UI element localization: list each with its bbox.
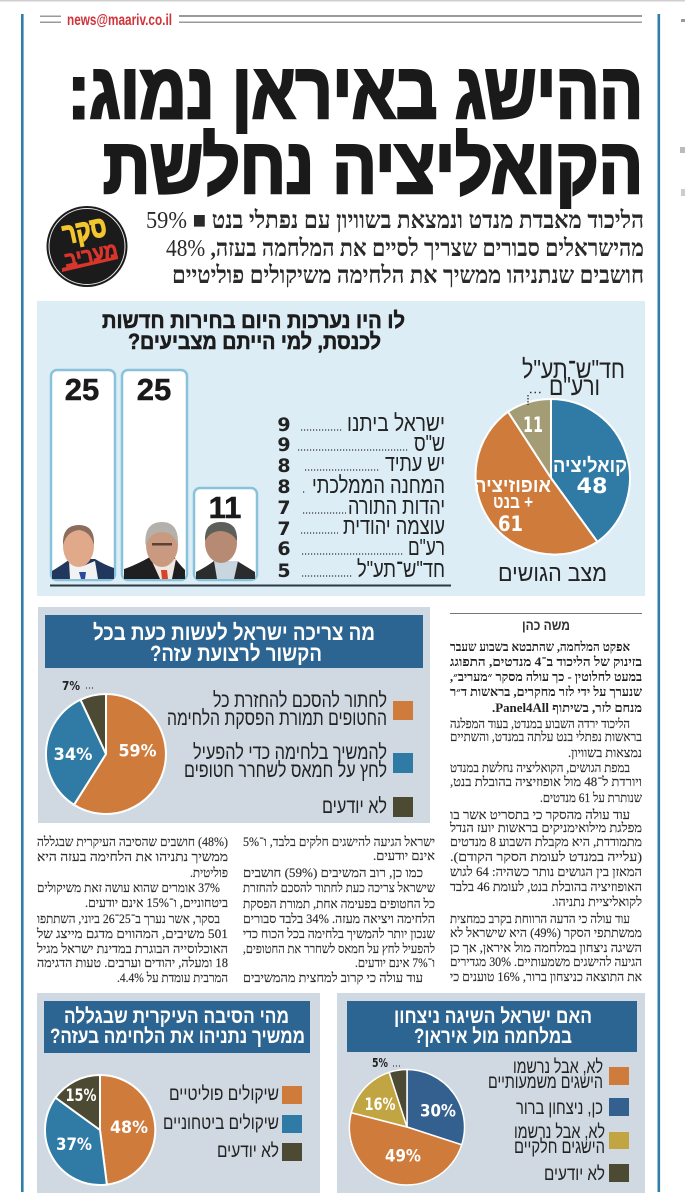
- panel: main reason: [37, 993, 320, 1193]
- pie: blocs: 48: [576, 474, 608, 498]
- pie chart: [46, 679, 166, 814]
- legend: להמשיך בלחימה כדי להפעיל: [193, 741, 387, 764]
- party list: 7: [277, 497, 291, 519]
- bar: Netanyahu 25: 25: [137, 372, 171, 407]
- subheading: חושבים שנתניהו ממשיך את הלחימה משיקולים פוליטיים: [172, 263, 644, 289]
- legend: [488, 1057, 629, 1185]
- party list: ש"ס: [414, 430, 445, 456]
- legend: לא, אבל נרשמו: [513, 1057, 603, 1078]
- article column: right: עוד עולה מהסקר כי בתסריט אשר בו: [450, 807, 630, 822]
- pie chart: 49%: [385, 1146, 421, 1166]
- panel title: [102, 308, 405, 354]
- article column: right: בזינוק של הליכוד ב־4 מנדטים, התפוגג: [450, 654, 642, 669]
- panel header: [45, 615, 423, 668]
- pie chart: 15%: [66, 1086, 96, 1106]
- panel header: מה צריכה ישראל לעשות כעת בכל: [93, 620, 375, 645]
- panel: victory over Iran: [337, 993, 645, 1193]
- subheading: [146, 208, 644, 289]
- legend: לא יודעים: [544, 1164, 605, 1185]
- bar: Bennett 25: [51, 370, 115, 580]
- pie chart: 48%: [110, 1118, 148, 1138]
- article column: left: [36, 834, 228, 985]
- party list: יש עתיד: [385, 450, 445, 476]
- pie chart: 59%: [118, 742, 156, 762]
- article column: right: המאזן בין הגושים נותר כשהיה: 64 לגוש: [450, 864, 642, 879]
- article column: left: ביטחוניים, ו־15% אינם יודעים.: [85, 895, 228, 910]
- bar: Golan 11: 11: [209, 490, 241, 525]
- pie label: Hadash-Taal and Raam: [522, 354, 625, 405]
- pie: blocs: אופוזיציה: [474, 475, 551, 497]
- article column: left: האוכלוסייה הבוגרת במדינת ישראל מגיל: [36, 941, 228, 956]
- pie: blocs: 61: [498, 512, 523, 536]
- panel title: לכנסת, למי הייתם מצביעים?: [128, 329, 381, 354]
- article column: right: [449, 613, 643, 984]
- party list: ישראל ביתנו: [347, 410, 445, 436]
- article column: left: 37% אומרים שהוא עושה זאת משיקולים: [37, 880, 220, 895]
- article column: right: הגיעה להישגים משמעותיים. 30% מגדירים: [450, 954, 642, 969]
- article column: middle: כל החטופים בפעימה אחת, תמורת הפסקת: [243, 896, 435, 911]
- legend: [167, 689, 413, 818]
- article column: right: ממשתתפי הסקר (49%) היא שישראל לא: [450, 925, 642, 940]
- party list: עוצמה יהודית: [343, 513, 445, 539]
- panel: what should Israel do: [38, 607, 430, 823]
- logo: poll badge: מעריב: [62, 238, 120, 272]
- party list: 9: [277, 414, 291, 436]
- article column: right: לקואליציית נתניהו.: [552, 894, 642, 909]
- legend: שיקולים פוליטיים: [169, 1084, 279, 1105]
- panel header: הקשור לרצועת עזה?: [150, 641, 322, 666]
- article column: middle: הלחימה ויציאה מעזה. 34% בלבד סבורים: [243, 911, 435, 926]
- pie caption: מצב הגושים: [498, 560, 607, 586]
- article column: right: משה כהן: [522, 617, 570, 633]
- article column: middle: להפעיל לחץ על חמאס לשחרר את החטופים,: [243, 941, 435, 956]
- bar: Golan 11: [194, 488, 257, 580]
- legend: החטופים תמורת הפסקת הלחימה: [167, 707, 387, 730]
- legend: שיקולים ביטחוניים: [163, 1113, 279, 1134]
- legend: הישגים חלקיים: [514, 1137, 605, 1158]
- party list: [277, 410, 445, 582]
- pie label: Hadash-Taal and Raam: חד"ש־תע"ל: [522, 354, 625, 384]
- article column: middle: ו־7% אינם יודעים.: [355, 955, 435, 970]
- article column: right: במעט לחלוטין - כך עולה מסקר ״מעריב״,: [450, 669, 642, 684]
- party list: רע"ם: [408, 534, 445, 560]
- logo: poll badge: סקר: [60, 211, 109, 251]
- article column: left: פוליטית.: [190, 865, 228, 880]
- party list: 9: [277, 434, 291, 456]
- pie chart: 16%: [364, 1095, 396, 1115]
- party list: 7: [277, 518, 291, 540]
- pie chart: [45, 1075, 155, 1185]
- article column: left: ממשיך נתניהו את הלחימה בעזה היא: [37, 849, 228, 864]
- article column: right: האופוזיציה בהובלת בנט, לעומת 46 בלבד: [450, 879, 642, 894]
- title: [68, 47, 643, 210]
- article column: right: שנותרת על 61 מנדטים.: [540, 790, 643, 805]
- panel header: במלחמה מול איראן?: [414, 1025, 572, 1048]
- article column: middle: שישראל צריכה כעת לחתור להסכם להחזרת: [243, 880, 436, 895]
- article column: left: בסקר, אשר נערך ב־25־26 ביוני, השתתפו: [37, 911, 220, 926]
- party list: המחנה הממלכתי: [312, 472, 445, 498]
- article column: middle: שנכון יותר להמשיך בלחימה בכל הכוח כדי: [243, 926, 436, 941]
- panel: seats poll: [37, 301, 645, 596]
- panel header: ממשיך נתניהו את הלחימה בעזה?: [50, 1025, 305, 1048]
- article column: right: שנערך על ידי לזר מחקרים, בראשות ד״ר: [450, 684, 643, 699]
- legend: לא יודעים: [322, 795, 387, 818]
- article column: middle: כמו כן, רוב המשיבים (59%) חושבים: [243, 865, 423, 880]
- article column: left: (48%) חושבים שהסיבה העיקרית שבגללה: [37, 834, 228, 849]
- pie: blocs: קואליציה: [553, 455, 627, 477]
- panel header: מהי הסיבה העיקרית שבגללה: [64, 1005, 289, 1028]
- party list: חד"ש־תע"ל: [357, 556, 445, 582]
- subheading: מהישראלים סבורים שצריך לסיים את המלחמה בעזה, 48%: [166, 236, 644, 262]
- party list: יהדות התורה: [348, 493, 445, 519]
- article column: middle: ישראל הגיעה להישגים חלקים בלבד, ו־5%: [243, 834, 435, 849]
- pie chart: 37%: [56, 1135, 92, 1155]
- article column: right: הליכוד ירדה השבוע במנדט, בעוד המפלגה: [450, 716, 630, 731]
- article column: right: בראשות נפתלי בנט עלתה במנדט, והשתיים: [450, 729, 642, 744]
- panel title: לו היו נערכות היום בחירות חדשות: [102, 308, 405, 333]
- bar: Bennett 25: 25: [65, 372, 99, 407]
- article column: right: מפלגת מילואימניקים בראשות יועז הנדל: [449, 820, 642, 835]
- article column: middle: עוד עולה כי קרוב למחצית מהמשיבים: [243, 970, 423, 985]
- pie chart: 5%: [372, 1056, 388, 1070]
- article column: right: אפקט המלחמה, שהתבטא בשבוע שעבר: [450, 639, 630, 654]
- pie label: Hadash-Taal and Raam: ורע"ם: [549, 371, 600, 401]
- pie chart: 7%: [62, 679, 80, 693]
- pie: blocs: 11: [523, 413, 543, 437]
- header strip: email: news@maariv.co.il: [67, 12, 172, 29]
- bar: Netanyahu 25: [122, 370, 187, 580]
- legend: לחתור להסכם להחזרת כל: [213, 689, 387, 712]
- legend: לא, אבל נרשמו: [514, 1122, 605, 1143]
- article column: left: 501 משיבים, המהווים מדגם מייצג של: [36, 926, 228, 941]
- pie chart: 30%: [420, 1102, 456, 1122]
- article column: left: 18 ומעלה, יהודים וערבים. טעות הדגימה: [37, 955, 228, 970]
- article column: middle: [243, 834, 436, 985]
- party list: 8: [277, 455, 291, 477]
- pie: blocs: + בנט: [493, 492, 533, 512]
- pie: blocs: [474, 399, 630, 555]
- logo: poll badge: [46, 206, 128, 287]
- article column: left: המרבית עומדת על 4.4%.: [117, 970, 228, 985]
- article column: right: את התוצאה כניצחון ברור, 16% טוענים כי: [450, 969, 642, 984]
- panel header: [44, 1001, 310, 1053]
- article column: right: מנחם לזר, בשיתוף Panel4All.: [492, 700, 642, 715]
- legend: הישגים משמעותיים: [488, 1072, 603, 1093]
- legend: לא יודעים: [217, 1141, 279, 1162]
- panel header: [347, 1001, 637, 1052]
- party list: 8: [277, 476, 291, 498]
- legend: לחץ על חמאס לשחרר חטופים: [184, 759, 387, 782]
- article column: right: מתמודדת, היא מקבלת השבוע 8 מנדטים: [450, 834, 642, 849]
- pie chart: 34%: [54, 745, 92, 765]
- subheading: הליכוד מאבדת מנדט ונמצאת בשוויון עם נפתלי בנט ■ 59%: [146, 208, 644, 234]
- article column: right: עוד עולה כי הדעה הרווחת בקרב כמחצית: [450, 911, 630, 926]
- article column: right: ויורדת ל־48 מול אופוזיציה בהובלת בנט,: [450, 774, 642, 789]
- legend: כן, ניצחון ברור: [516, 1098, 603, 1119]
- party list: 6: [277, 538, 291, 560]
- article column: middle: אינם יודעים.: [373, 848, 435, 863]
- pie chart: [349, 1056, 465, 1185]
- article column: right: במפת הגושים, הקואליציה נחלשת במנדט: [450, 760, 630, 775]
- panel header: האם ישראל השיגה ניצחון: [394, 1005, 592, 1028]
- party list: 5: [277, 560, 291, 582]
- legend: [163, 1084, 302, 1162]
- article column: right: נמצאות בשוויון.: [568, 745, 642, 760]
- article column: right: (עלייה במנדט לעומת הסקר הקודם).: [450, 849, 642, 864]
- article column: right: השיגה ניצחון במלחמה מול איראן, אך כן: [450, 940, 642, 955]
